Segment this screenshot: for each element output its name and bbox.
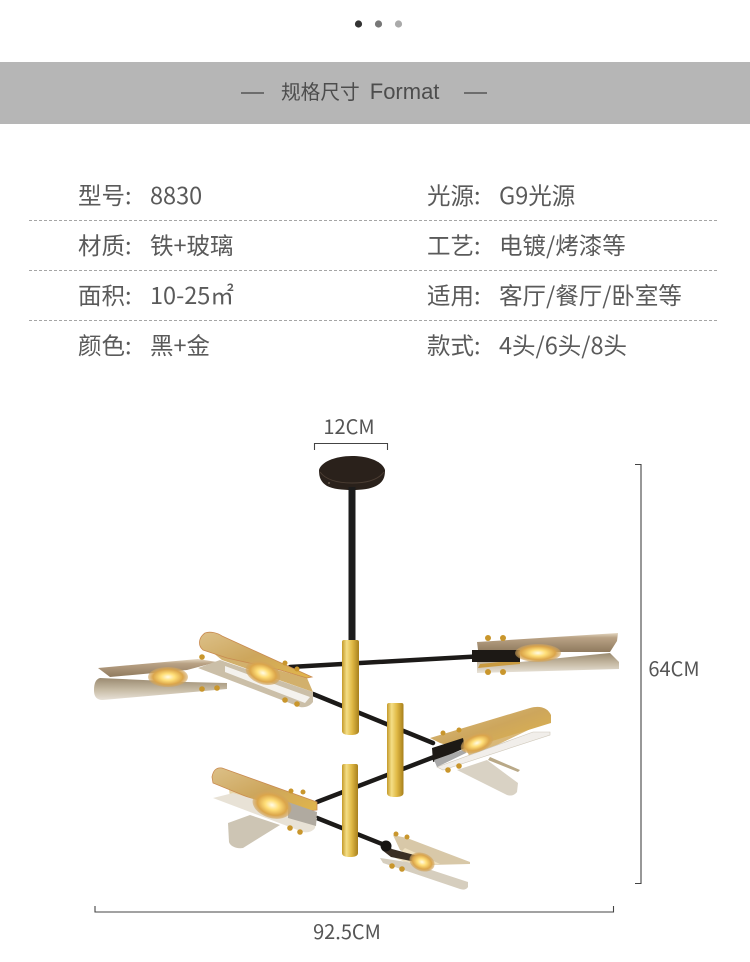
spec table: 10-25㎡ [150,277,234,311]
spec table: 8830 [150,177,202,211]
gold tube lower [342,764,358,857]
stem [348,487,356,642]
lamp: left [94,654,227,700]
lamp: upper right [472,633,619,675]
dimension: ceiling plate width: 12CM [323,411,375,440]
heading text: 规格尺寸 Format [281,79,439,104]
lamp: upper middle [198,632,313,707]
dimension: width: 92.5CM [313,916,381,945]
arm rods [290,656,476,846]
lamp: lower left [212,768,317,848]
spec: usage: 适用: [427,277,481,311]
lamp: lower right [380,832,470,890]
spec table: 电镀/烤漆等 [499,227,626,261]
spec: area: 面积: [78,277,132,311]
chandelier diagram with dimensions [94,411,700,945]
dimension: width [95,906,614,945]
left dash [241,92,264,94]
spec table: 4头/6头/8头 [499,327,627,361]
spec: colour: 颜色: [78,327,132,361]
spec: style: 款式: [427,327,481,361]
spec table: 铁+玻璃 [150,227,234,261]
spec: model: 型号: [78,177,132,211]
spec: light source: 光源: [427,177,481,211]
spec: material: 材质: [78,227,132,261]
dimension: ceiling plate width [314,411,388,450]
dimension: height: 64CM [648,653,700,682]
dimension: height [635,464,700,884]
pagination dots [354,20,402,28]
ceiling plate [319,456,385,490]
spec table [29,177,717,361]
spec table: 客厅/餐厅/卧室等 [499,277,682,311]
spec table: 黑+金 [150,327,210,361]
gold tube upper [342,640,359,735]
right dash [464,92,487,94]
lamp: middle right [430,707,551,796]
section heading banner [0,62,750,124]
spec table: G9光源 [499,177,575,211]
spec: craft: 工艺: [427,227,481,261]
gold tube middle [387,703,404,797]
